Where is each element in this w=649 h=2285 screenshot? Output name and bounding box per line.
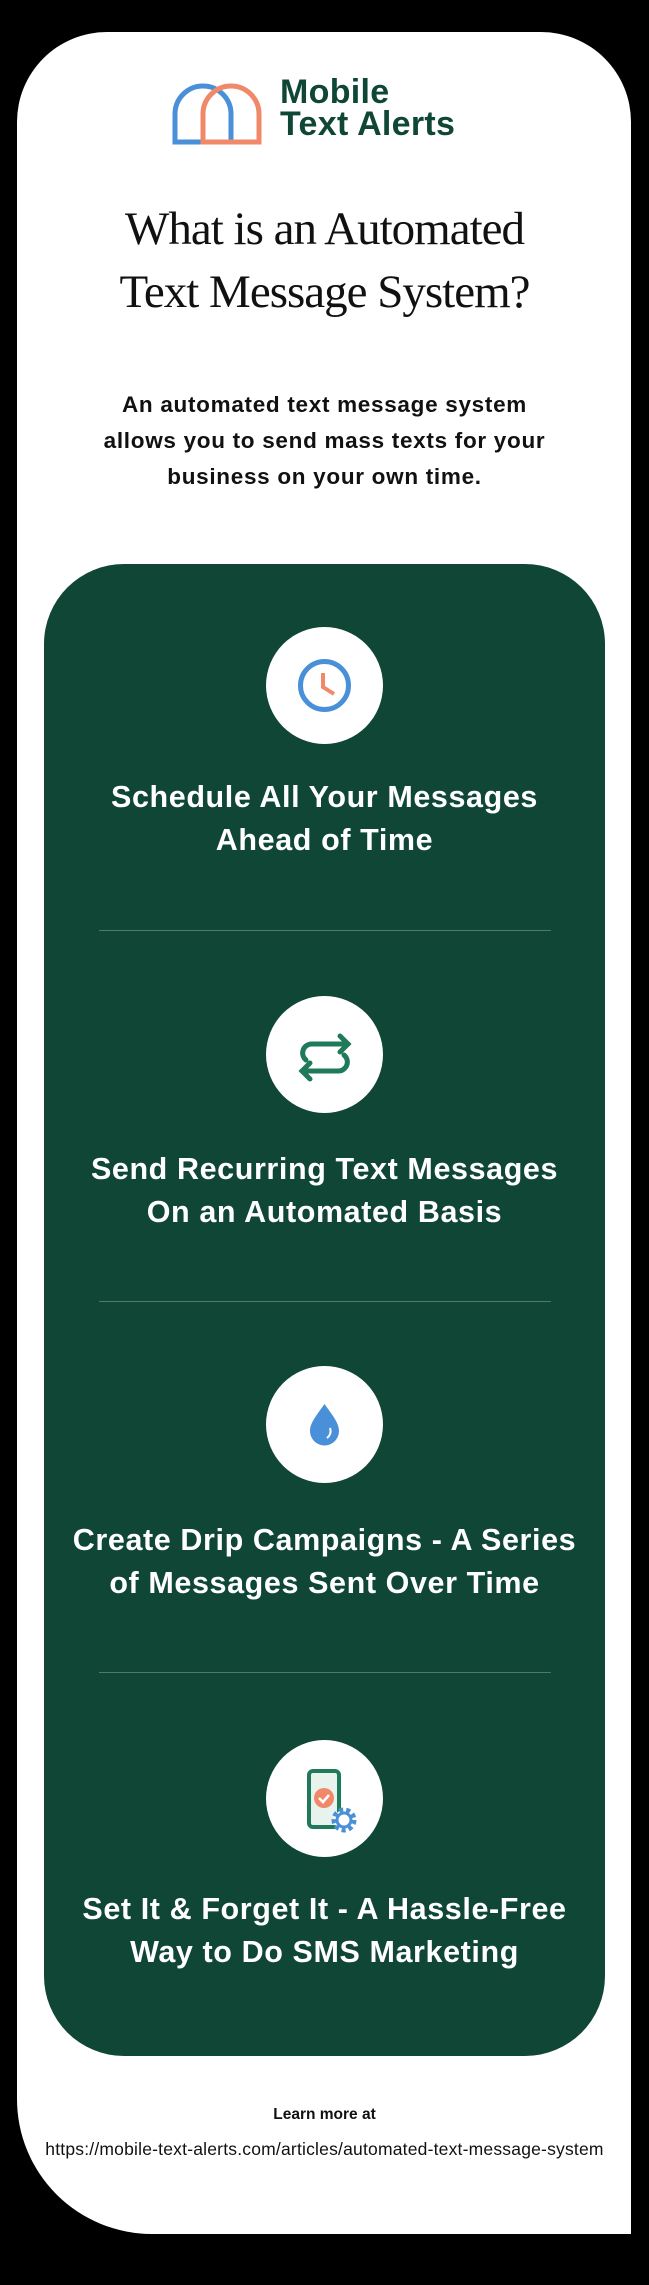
heading 2: Send Recurring Text Messages: [91, 1152, 558, 1186]
heading 3: [73, 1523, 576, 1600]
subtitle: An automated text message system: [122, 392, 527, 417]
title: Text Message System?: [119, 266, 530, 318]
heading 4: [82, 1892, 567, 1969]
heading 4: Way to Do SMS Marketing: [130, 1935, 519, 1969]
heading 1: Schedule All Your Messages: [111, 780, 538, 814]
logo: Mobile: [280, 73, 389, 111]
heading 4: Set It & Forget It - A Hassle-Free: [82, 1892, 567, 1926]
panel: features: [44, 564, 605, 2056]
footer: [45, 2106, 604, 2159]
heading 3: Create Drip Campaigns - A Series: [73, 1523, 576, 1557]
heading 1: Ahead of Time: [216, 823, 433, 857]
subtitle: business on your own time.: [167, 464, 482, 489]
title: What is an Automated: [125, 203, 524, 255]
heading 3: of Messages Sent Over Time: [109, 1566, 540, 1600]
logo: Text Alerts: [280, 105, 455, 143]
icon: recurring arrows: [266, 996, 383, 1113]
icon: phone gear: [266, 1740, 383, 1857]
icon: clock: [266, 627, 383, 744]
heading 1: [111, 780, 538, 857]
title: [119, 203, 530, 318]
heading 2: [91, 1152, 558, 1229]
subtitle: [104, 392, 545, 489]
icon: drop: [266, 1366, 383, 1483]
subtitle: allows you to send mass texts for your: [104, 428, 545, 453]
footer: Learn more at: [273, 2106, 376, 2123]
logo: [172, 73, 455, 144]
heading 2: On an Automated Basis: [147, 1195, 502, 1229]
footer: https://mobile-text-alerts.com/articles/automated-text-message-system: [45, 2139, 604, 2159]
